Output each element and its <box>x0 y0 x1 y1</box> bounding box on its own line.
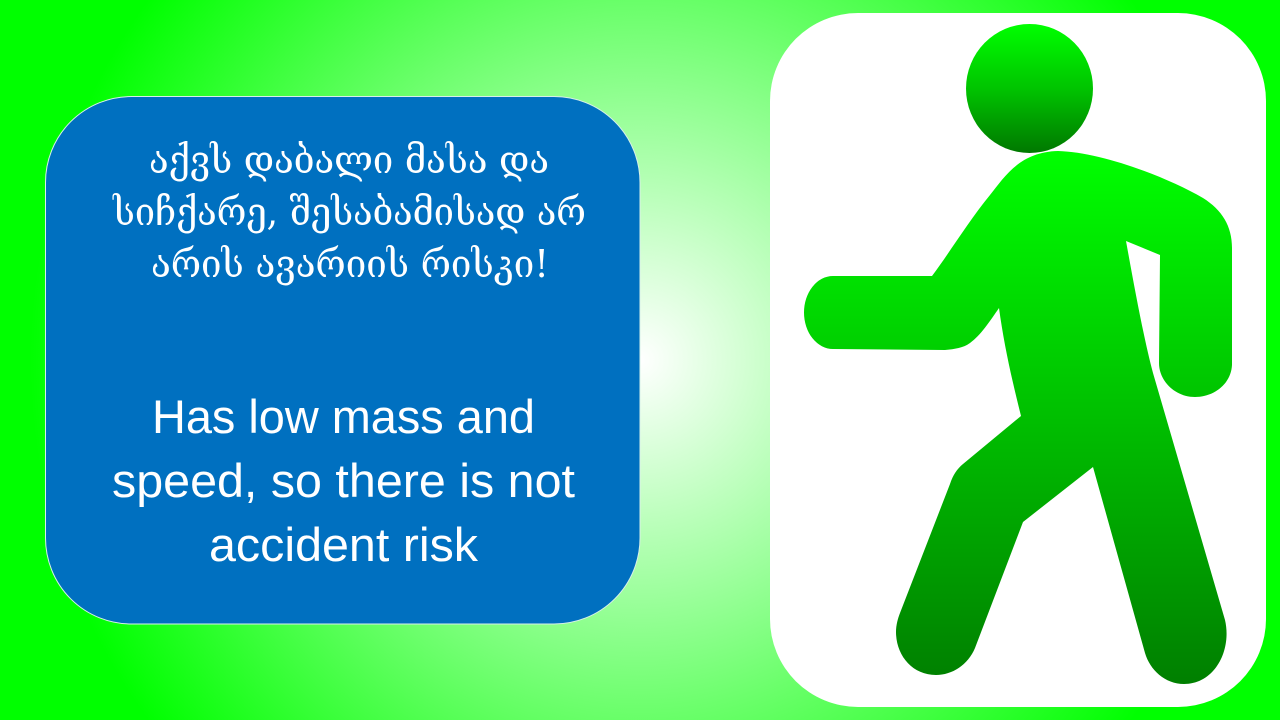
Georgian text block: სიჩქარე, შესაბამისად არ <box>112 190 586 234</box>
figure body <box>804 151 1232 684</box>
English text block <box>112 390 575 571</box>
Georgian text block: არის ავარიის რისკი! <box>151 242 549 286</box>
Georgian text block: აქვს დაბალი მასა და <box>149 138 549 182</box>
icon: walking figure <box>804 24 1232 684</box>
panel: pedestrian icon <box>770 13 1266 707</box>
figure head <box>966 24 1093 153</box>
panel: description <box>46 96 640 624</box>
icon background <box>770 13 1266 707</box>
English text block: Has low mass and <box>152 390 535 443</box>
panel background <box>46 96 640 624</box>
Georgian text block <box>112 138 586 286</box>
English text block: speed, so there is not <box>112 454 575 507</box>
English text block: accident risk <box>209 518 479 571</box>
